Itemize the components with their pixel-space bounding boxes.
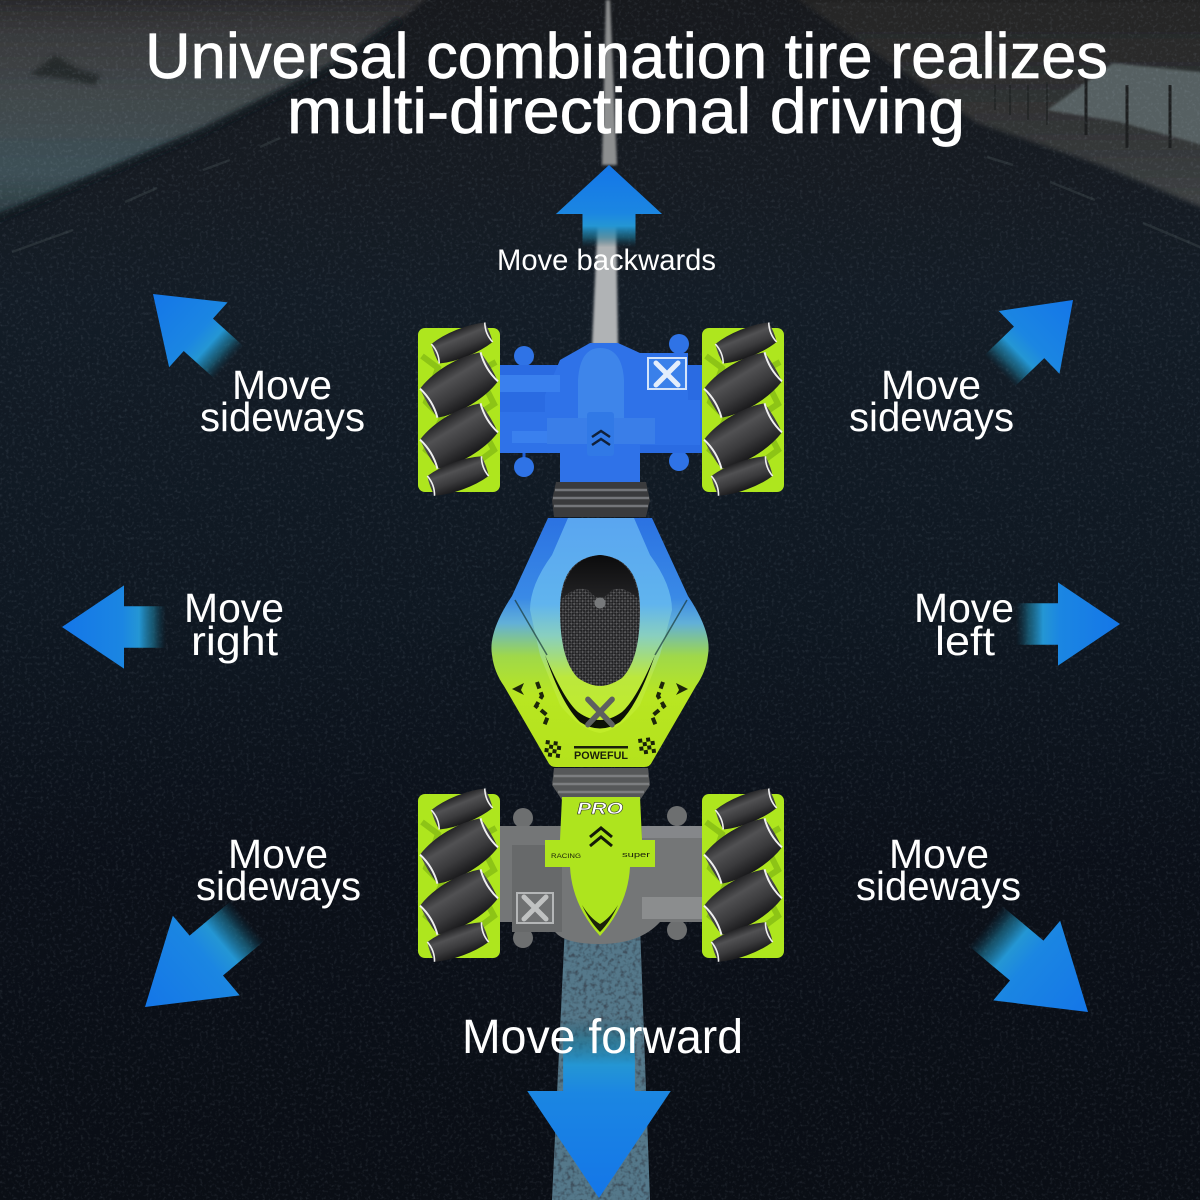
label: move backwards: Move backwards: [497, 244, 716, 277]
faint side road marks: [12, 138, 1200, 252]
fence posts: [995, 75, 1170, 148]
right roadside shoulder: [770, 0, 1200, 215]
label: move right: right: [191, 618, 279, 664]
chevrons: [592, 431, 610, 445]
racing text: RACING: [551, 853, 581, 860]
arrow: forward: [527, 1018, 671, 1198]
powerful text: POWEFUL: [574, 750, 628, 762]
cockpit: [560, 555, 640, 686]
wheel rear left: [416, 785, 502, 966]
label: move left: Move: [914, 585, 1014, 631]
front blue axle: [500, 334, 702, 487]
label: sideways lower right: Move: [889, 831, 989, 877]
dark rocks, left shoulder: [30, 55, 100, 85]
arrow: right label, pointing left: [62, 585, 166, 669]
label: sideways upper left: sideways: [200, 394, 365, 440]
arrow: backwards: [556, 165, 662, 247]
left marker: [512, 683, 524, 695]
toy car: [416, 319, 786, 966]
driver head: [594, 598, 606, 608]
right marker: [676, 683, 688, 695]
gray bellows, front: [552, 482, 650, 517]
rear lime nose: [545, 797, 655, 936]
label: move left: [914, 585, 1014, 664]
wheel front right: [700, 319, 786, 500]
lane marking behind the backwards arrow: [592, 215, 618, 345]
dark swoosh: [545, 655, 655, 728]
lane marking near foreground: [552, 925, 650, 1200]
label: sideways lower left: Move: [228, 831, 328, 877]
label: sideways upper right: Move: [881, 362, 981, 408]
lighter panel around cockpit: [530, 518, 672, 733]
x logo body: [588, 699, 612, 725]
title: [145, 20, 1108, 147]
super text: super: [622, 852, 651, 859]
gray bellows, rear: [552, 768, 650, 800]
left roadside shoulder: [0, 0, 450, 225]
arrow: lower right: [952, 886, 1121, 1052]
label: move right: Move: [184, 585, 284, 631]
dark edge of left shoulder: [0, 20, 400, 221]
pro text: PRO: [577, 799, 623, 818]
left flag decal: [536, 682, 548, 726]
lane marking near the horizon: [602, 0, 617, 165]
label: sideways lower left: [196, 831, 361, 909]
label: move right: [184, 585, 284, 664]
label: sideways lower right: sideways: [856, 863, 1021, 909]
title: Universal combination tire realizes: [145, 20, 1108, 92]
arrow: left label, pointing right: [1016, 582, 1120, 666]
wheel rear right: [700, 785, 786, 966]
label: move left: left: [935, 618, 996, 664]
label: sideways lower left: sideways: [196, 863, 361, 909]
arrow: lower left: [112, 881, 281, 1047]
rear gray axle: [500, 806, 702, 948]
field behind fence: [1047, 63, 1200, 150]
arrow: upper right: [969, 269, 1103, 403]
arrow: upper left: [124, 262, 258, 395]
x badge gray: [517, 893, 553, 923]
label: sideways upper left: Move: [232, 362, 332, 408]
left checker decal: [544, 740, 562, 758]
wheel front left: [416, 319, 502, 500]
label: sideways upper right: sideways: [849, 394, 1014, 440]
chassis shell: [491, 518, 709, 767]
right flag decal: [652, 682, 664, 726]
label: move forward: Move forward: [462, 1011, 743, 1064]
x badge blue: [648, 358, 686, 389]
thin crease lines: [515, 600, 687, 655]
label: sideways upper left: [200, 362, 365, 440]
right checker decal: [638, 737, 656, 755]
label: sideways lower right: [856, 831, 1021, 909]
title: multi-directional driving: [287, 75, 965, 147]
label: sideways upper right: [849, 362, 1014, 440]
